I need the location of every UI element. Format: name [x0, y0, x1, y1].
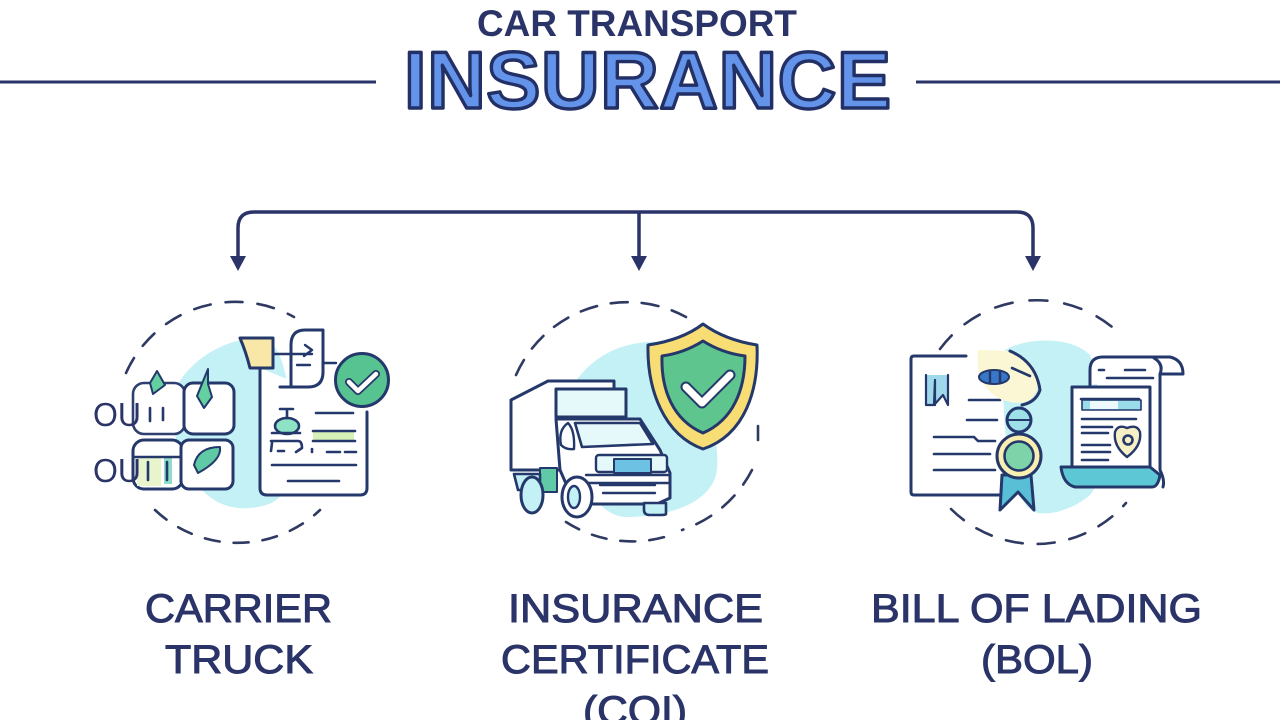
icon: carrier truck	[93, 302, 388, 543]
cup	[240, 338, 273, 368]
icon: insurance certificate	[511, 302, 758, 541]
label: bill of lading: BILL OF LADING	[871, 587, 1202, 631]
connector arrows	[230, 212, 1041, 271]
label: carrier truck: TRUCK	[165, 638, 313, 682]
medal hand	[977, 350, 1037, 403]
left certificate	[911, 356, 1001, 495]
label: carrier truck	[145, 587, 332, 682]
cyan blob	[1003, 340, 1101, 513]
title rule: right	[916, 80, 1280, 84]
leaves	[150, 371, 165, 394]
letter marks: OU	[93, 396, 141, 433]
doc drawing	[275, 418, 299, 434]
medal	[1007, 408, 1031, 432]
label: insurance certificate	[501, 587, 769, 720]
label: bill of lading	[871, 587, 1202, 682]
check badge	[336, 354, 388, 406]
truck box	[511, 381, 614, 470]
label: bill of lading: (BOL)	[981, 638, 1093, 682]
cyan blob	[564, 342, 717, 517]
cyan blob	[170, 338, 292, 508]
icon: carrier truck: OU	[93, 452, 141, 489]
headlights and grille	[596, 455, 667, 472]
shield	[648, 324, 757, 449]
inner paper	[1072, 387, 1150, 472]
title	[404, 3, 891, 126]
truck cab	[556, 419, 670, 504]
wheels	[540, 468, 557, 492]
tiles	[133, 383, 185, 434]
small note	[280, 330, 323, 387]
label: carrier truck: CARRIER	[145, 587, 332, 631]
dashed ring	[516, 302, 758, 541]
seal	[1115, 427, 1140, 457]
right scroll	[1090, 357, 1183, 385]
label: insurance certificate: CERTIFICATE	[501, 638, 769, 682]
icon: bill of lading	[911, 300, 1183, 544]
scroll base	[1061, 467, 1160, 487]
heading: car transport: CAR TRANSPORT	[477, 3, 797, 44]
heading: insurance: INSURANCE	[404, 36, 891, 126]
shield check	[686, 375, 730, 403]
dashed ring	[126, 302, 320, 543]
title rule: left	[0, 80, 376, 84]
document	[260, 368, 367, 495]
label: insurance certificate: INSURANCE	[508, 587, 763, 631]
dashed ring	[940, 300, 1126, 544]
